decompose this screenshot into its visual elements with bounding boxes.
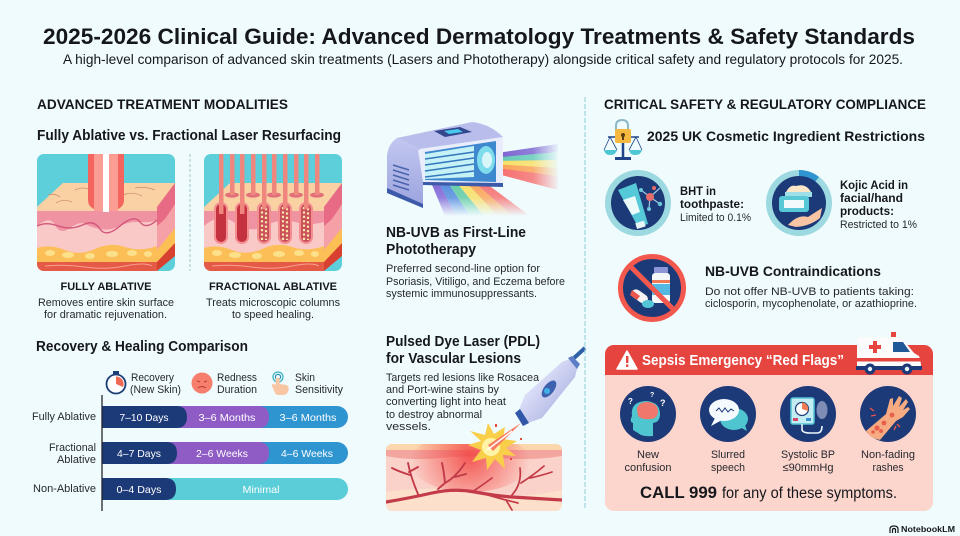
- icon: blood pressure monitor: [780, 386, 836, 442]
- label: fully ablative: for dramatic rejuvenation.: [44, 309, 167, 321]
- label: systolic BP: Systolic BP: [781, 449, 835, 461]
- text: BHT: BHT in: [680, 184, 716, 198]
- icon: touch hand: [272, 372, 289, 395]
- icon: BHT toothpaste gauge: [605, 170, 671, 236]
- text block: pulsed dye laser: Pulsed Dye Laser (PDL): [386, 334, 540, 350]
- label: non-fading rashes: rashes: [872, 462, 904, 474]
- label: fully ablative: Removes entire skin surface: [38, 297, 174, 309]
- text: Kojic acid: facial/hand: [840, 191, 903, 205]
- text block: pulsed dye laser: to destroy abnormal: [386, 409, 482, 421]
- label: systolic BP: [781, 449, 835, 474]
- heading: laser resurfacing: Fully Ablative vs. Fractional Laser Resurfacing: [37, 128, 341, 144]
- legend: recovery: [130, 372, 181, 396]
- panel background: [605, 345, 933, 511]
- label: systolic BP: ≤90mmHg: [782, 462, 834, 474]
- label: fractional ablative: Treats microscopic columns: [206, 297, 340, 309]
- label: fully ablative: FULLY ABLATIVE: [60, 281, 152, 293]
- icon: new confusion: ?: [628, 397, 633, 406]
- label: fractional ablative: [206, 281, 340, 321]
- illustration: fully ablative skin: [37, 154, 175, 271]
- title: 2025-2026 Clinical Guide: Advanced Dermatology Treatments & Safety Standards: [43, 24, 915, 49]
- text block: pulsed dye laser: Targets red lesions like Rosacea: [386, 372, 540, 384]
- label: slurred speech: speech: [711, 462, 745, 474]
- legend: recovery: (New Skin): [130, 384, 181, 396]
- call to action: CALL 999: [640, 483, 717, 502]
- label: new confusion: [624, 449, 672, 474]
- subtitle: A high-level comparison of advanced skin treatments (Lasers and Phototherapy) alongside critical safety and regulatory protocols for 2025.: [63, 52, 903, 67]
- text block: NB-UVB: systemic immunosuppressants.: [386, 288, 537, 300]
- text: contraindications: Do not offer NB-UVB to patients taking:: [705, 286, 914, 298]
- text: Kojic acid: [840, 178, 917, 231]
- bar chart: recovery and healing: Minimal: [242, 484, 280, 496]
- legend: redness: [217, 372, 257, 396]
- row labels: [32, 411, 96, 495]
- bar chart: recovery and healing: 3–6 Months: [198, 412, 256, 424]
- illustration: skin with vessels: [386, 444, 562, 511]
- icon: new confusion: ?: [660, 398, 666, 408]
- text block: NB-UVB: [386, 225, 565, 300]
- text: BHT: Limited to 0.1%: [680, 212, 751, 224]
- text: Kojic acid: Kojic Acid in: [840, 178, 908, 192]
- legend: skin sensitivity: Sensitivity: [295, 384, 343, 396]
- text: BHT: [680, 184, 751, 224]
- bar chart: recovery and healing: 2–6 Weeks: [196, 448, 248, 460]
- illustration: NB-UVB device: [387, 122, 558, 216]
- bar chart: recovery and healing: 0–4 Days: [116, 484, 162, 496]
- icon: prohibited medication: [620, 256, 684, 320]
- text block: NB-UVB: NB-UVB as First-Line: [386, 225, 526, 241]
- text: Kojic acid: products:: [840, 204, 894, 218]
- icon: Kojic acid jar gauge: [766, 170, 832, 236]
- panel: sepsis red flags: [605, 332, 933, 511]
- label: new confusion: confusion: [624, 462, 672, 474]
- text block: NB-UVB: Phototherapy: [386, 242, 476, 258]
- text block: pulsed dye laser: vessels.: [386, 421, 431, 433]
- label: fractional ablative: FRACTIONAL ABLATIVE: [209, 281, 337, 293]
- row labels: Fractional: [49, 442, 96, 454]
- illustration: PDL handpiece and flash: [468, 348, 585, 470]
- label: non-fading rashes: [861, 449, 915, 474]
- icon: new confusion: ?: [650, 392, 654, 399]
- section heading: critical safety: CRITICAL SAFETY & REGULATORY COMPLIANCE: [604, 97, 926, 112]
- icon: stopwatch: [106, 371, 126, 394]
- panel heading: Sepsis Emergency “Red Flags”: [642, 353, 844, 369]
- label: slurred speech: Slurred: [711, 449, 745, 461]
- logo: NotebookLM: NotebookLM: [901, 524, 955, 534]
- text: contraindications: NB-UVB Contraindications: [705, 263, 881, 279]
- label: slurred speech: [711, 449, 745, 474]
- text block: pulsed dye laser: and Port-wine stains by: [386, 384, 499, 396]
- icon: new confusion: [620, 386, 676, 442]
- icon: scales with padlock: [604, 120, 642, 160]
- call to action: for any of these symptoms.: [722, 485, 897, 502]
- icon: red face: [192, 372, 212, 394]
- icon: warning triangle: [617, 351, 637, 369]
- label: non-fading rashes: Non-fading: [861, 449, 915, 461]
- bar chart: recovery and healing: 7–10 Days: [120, 412, 168, 424]
- legend: skin sensitivity: Skin: [295, 372, 315, 384]
- text block: pulsed dye laser: for Vascular Lesions: [386, 351, 521, 367]
- legend: redness: Duration: [217, 384, 257, 396]
- icon: ambulance: [856, 332, 922, 374]
- illustration: fractional ablative skin: [204, 154, 342, 271]
- center divider: [584, 97, 586, 510]
- icon: slurred speech: [700, 386, 756, 442]
- bar chart: recovery and healing: [102, 406, 348, 500]
- divider between illustrations: [189, 154, 191, 271]
- text block: pulsed dye laser: converting light into heat: [386, 396, 506, 408]
- row labels: Fully Ablative: [32, 411, 96, 423]
- bar chart: recovery and healing: 3–6 Months: [280, 412, 336, 424]
- legend: redness: Redness: [217, 372, 257, 384]
- text: BHT: toothpaste:: [680, 197, 744, 211]
- label: new confusion: New: [637, 449, 659, 461]
- text block: NB-UVB: Preferred second-line option for: [386, 263, 540, 275]
- icon: non-fading rash: [860, 386, 916, 442]
- bar chart: recovery and healing: 4–6 Weeks: [281, 448, 333, 460]
- section heading: advanced treatment modalities: ADVANCED TREATMENT MODALITIES: [37, 97, 288, 112]
- text: contraindications: ciclosporin, mycophenolate, or azathioprine.: [705, 298, 917, 310]
- text block: NB-UVB: Psoriasis, Vitiligo, and Eczema before: [386, 276, 565, 288]
- chart axis: [101, 395, 103, 511]
- row labels: Ablative: [57, 454, 96, 466]
- text: contraindications: [705, 263, 917, 310]
- legend: skin sensitivity: [295, 372, 343, 396]
- bar chart: recovery and healing: 4–7 Days: [117, 448, 161, 460]
- call to action: [640, 483, 897, 502]
- label: fully ablative: [38, 281, 174, 321]
- text: Kojic acid: Restricted to 1%: [840, 219, 917, 231]
- text block: pulsed dye laser: [386, 334, 540, 433]
- heading: UK restrictions: 2025 UK Cosmetic Ingredient Restrictions: [647, 128, 925, 144]
- row labels: Non-Ablative: [33, 483, 96, 495]
- heading: recovery comparison: Recovery & Healing Comparison: [36, 339, 248, 355]
- legend: recovery: Recovery: [131, 372, 174, 384]
- label: fractional ablative: to speed healing.: [232, 309, 314, 321]
